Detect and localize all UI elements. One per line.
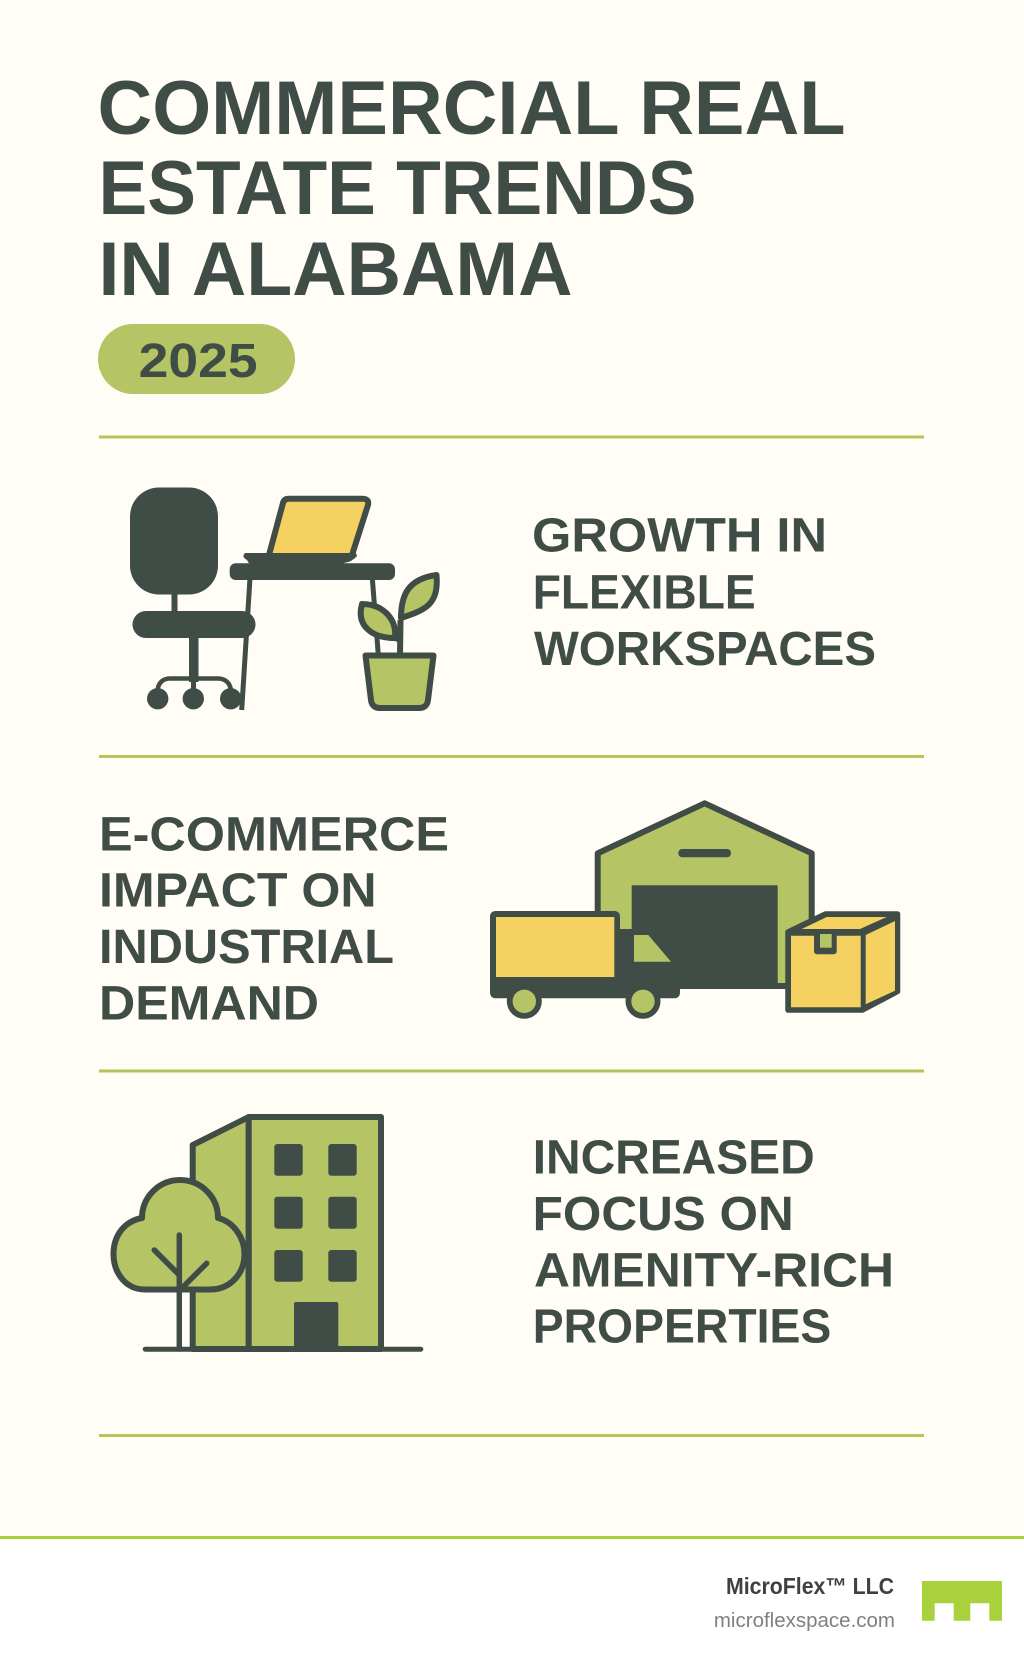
footer band	[0, 1536, 1024, 1666]
trend heading: e-commerce and industrial demand: E-COMMERCE	[99, 809, 449, 862]
icon: office desk with chair, laptop and plant	[130, 488, 437, 710]
trend heading: amenity-rich properties: INCREASED	[533, 1132, 815, 1185]
trend heading: flexible workspaces: GROWTH IN	[532, 510, 827, 563]
trend heading: flexible workspaces: FLEXIBLE	[533, 566, 756, 619]
trend heading: amenity-rich properties: PROPERTIES	[533, 1301, 831, 1354]
trend heading: e-commerce and industrial demand	[99, 809, 449, 1030]
ground line	[143, 1347, 423, 1352]
plant	[361, 575, 437, 708]
building	[193, 1117, 381, 1349]
title: COMMERCIAL REAL	[98, 66, 846, 151]
icon: warehouse with truck and box	[490, 803, 898, 1019]
trend heading: e-commerce and industrial demand: INDUSTRIAL	[99, 921, 394, 974]
title: ESTATE TRENDS	[98, 146, 696, 231]
truck	[490, 911, 680, 1019]
company name and website: MicroFlex™ LLC	[726, 1573, 894, 1599]
trend heading: e-commerce and industrial demand: DEMAND	[99, 977, 319, 1030]
year badge: 2025: 2025	[139, 335, 258, 388]
company name and website	[714, 1573, 895, 1632]
tree	[114, 1180, 252, 1349]
trend heading: flexible workspaces	[532, 510, 876, 676]
trend heading: amenity-rich properties: FOCUS ON	[533, 1188, 794, 1241]
trend heading: amenity-rich properties: AMENITY-RICH	[534, 1245, 894, 1298]
icon: MicroFlex logo	[922, 1581, 1002, 1621]
trend heading: flexible workspaces: WORKSPACES	[534, 623, 876, 676]
laptop	[243, 499, 368, 565]
title	[98, 66, 846, 312]
title: IN ALABAMA	[98, 227, 572, 312]
chair	[130, 488, 256, 709]
box	[788, 914, 898, 1010]
desk	[230, 563, 395, 710]
icon: office building with tree	[114, 1117, 423, 1352]
year badge: 2025	[98, 324, 295, 394]
company name and website: microflexspace.com	[714, 1609, 895, 1632]
trend heading: e-commerce and industrial demand: IMPACT ON	[99, 865, 377, 918]
trend heading: amenity-rich properties	[533, 1132, 894, 1354]
warehouse	[598, 803, 812, 988]
